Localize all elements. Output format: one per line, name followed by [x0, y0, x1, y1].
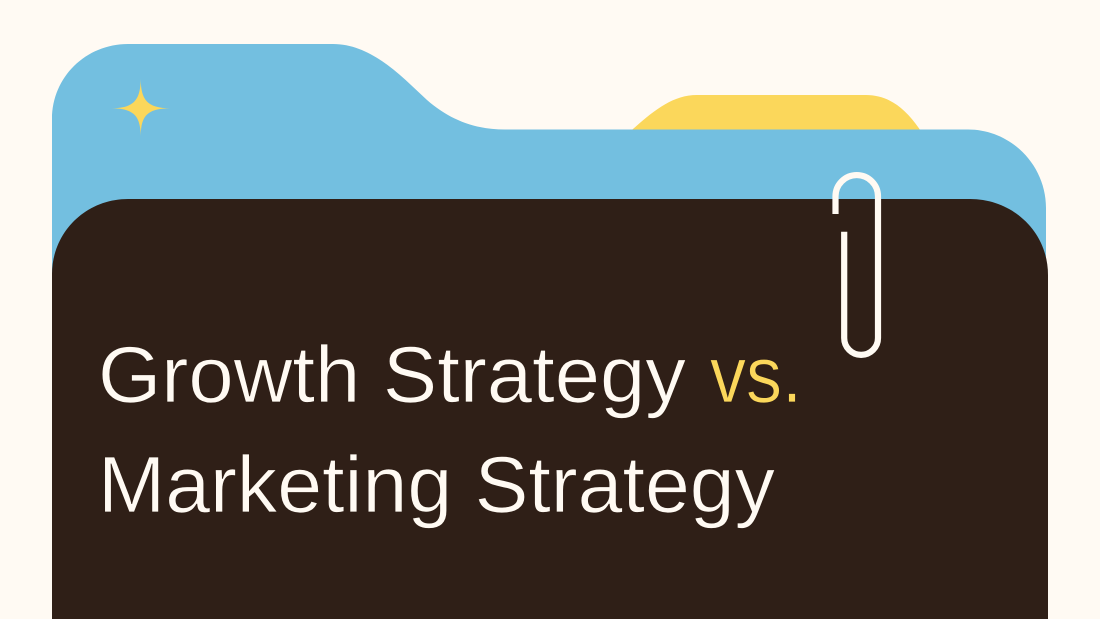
- title accent: vs.: vs.: [710, 330, 802, 419]
- title line 2: Marketing Strategy: [98, 440, 775, 529]
- dark folder front: [52, 199, 1048, 619]
- title line 1: Growth Strategy: [98, 330, 686, 419]
- icon: paperclip: [836, 175, 878, 355]
- blue folder back: [52, 44, 1046, 300]
- yellow folder tab: [625, 95, 924, 136]
- title: [98, 330, 802, 529]
- icon: sparkle: [112, 79, 170, 136]
